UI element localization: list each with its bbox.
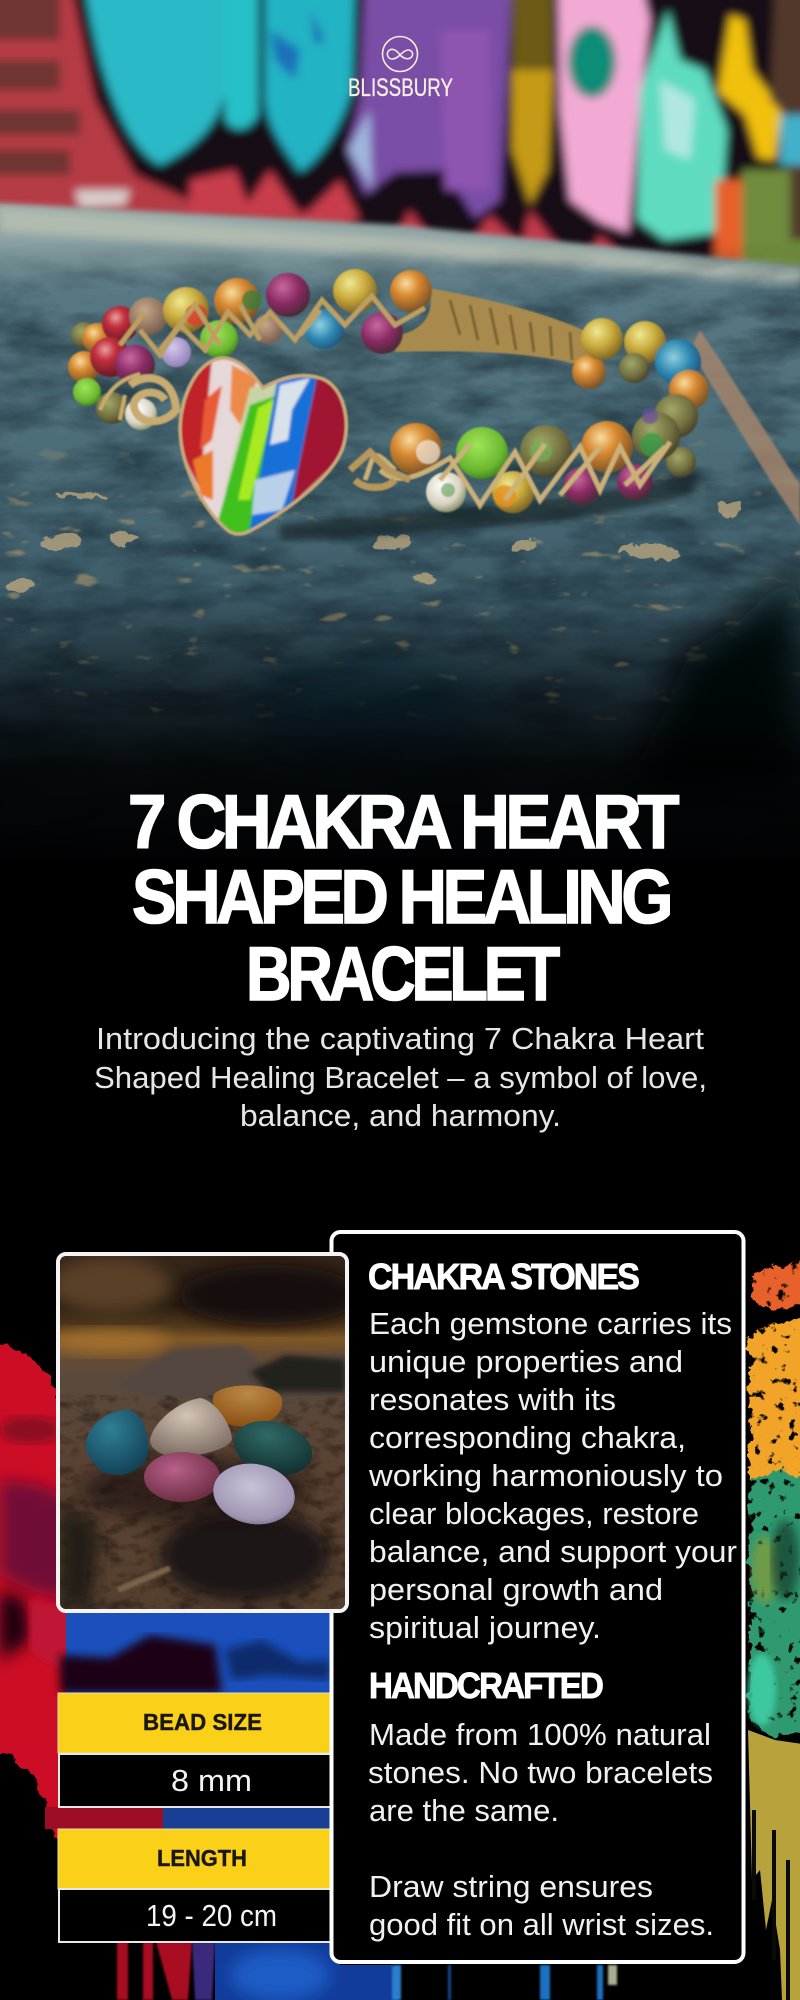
brand name: BLISSBURY: [348, 74, 453, 102]
panel: text card: [332, 1232, 744, 1962]
spec table: BEAD SIZE: [143, 1709, 262, 1735]
twig: [118, 1568, 170, 1590]
yellow paint: [750, 1315, 800, 1480]
pale ledge top: [0, 208, 800, 285]
chakra stones paragraph: Each gemstone carries its: [369, 1306, 732, 1341]
heading: chakra stones: CHAKRA STONES: [368, 1256, 639, 1297]
heading: BRACELET: [246, 932, 560, 1017]
far rocks: [142, 1343, 344, 1375]
chakra stones paragraph: spiritual journey.: [369, 1610, 601, 1645]
stone ledge: [0, 199, 800, 804]
front bottom beads: [426, 447, 696, 513]
red paint: [0, 1346, 190, 1838]
fit paragraph: Draw string ensures: [369, 1869, 653, 1904]
right back beads: [572, 318, 709, 438]
hero photo: [0, 0, 800, 880]
icon: infinity circle: [382, 36, 418, 72]
left clasp knot: [100, 374, 176, 430]
pink stone: [144, 1452, 220, 1502]
heading: SHAPED HEALING: [132, 855, 670, 940]
spec table: [58, 1693, 334, 1942]
contact shadow: [280, 470, 700, 540]
intro paragraph: Introducing the captivating 7 Chakra Heart: [96, 1021, 704, 1056]
length value: [59, 1889, 334, 1942]
strip blue: [163, 1807, 333, 1829]
chakra stones paragraph: [368, 1306, 737, 1645]
heading: [128, 780, 679, 1017]
back cord: [395, 288, 600, 368]
warm blurred top left: [50, 1257, 170, 1313]
stone stripes: [180, 358, 346, 534]
chakra stones paragraph: working harmoniously to: [368, 1458, 723, 1493]
amber horizon: [50, 1330, 170, 1354]
dark shade: [0, 1590, 30, 1660]
dark red gap: [60, 1635, 222, 1693]
chakra stones paragraph: corresponding chakra,: [369, 1420, 686, 1455]
purple shade: [0, 1480, 70, 1600]
bead size label: [58, 1693, 333, 1753]
intro paragraph: balance, and harmony.: [240, 1098, 561, 1133]
green paint: [750, 1470, 800, 1740]
graffiti wall: [0, 0, 800, 280]
bottom fade: [0, 590, 800, 860]
handcrafted paragraph: [368, 1717, 713, 1828]
back cord zigzag: [120, 296, 425, 355]
dark drip lines: [752, 1810, 790, 2000]
front top beads: [390, 408, 680, 479]
dark red mottling: [0, 1416, 60, 1444]
heading: 7 CHAKRA HEART: [128, 780, 679, 865]
bottom drips purple: [192, 1942, 215, 2000]
blue paint main: [66, 1608, 334, 1694]
chakra stones paragraph: unique properties and: [369, 1344, 683, 1379]
right clasp: [350, 452, 410, 488]
tan rock edge: [690, 330, 800, 525]
spec table: 19 - 20 cm: [146, 1898, 277, 1933]
intro paragraph: Shaped Healing Bracelet – a symbol of love,: [94, 1060, 707, 1095]
olive speckle: [751, 1536, 779, 1604]
teal stone: [86, 1410, 148, 1475]
tan flecks: [7, 493, 744, 592]
intro paragraph: [94, 1021, 707, 1133]
bottom blue: [215, 1942, 398, 2000]
dark rock corner: [642, 552, 800, 776]
front cord zigzag: [365, 442, 670, 505]
rock texture: [0, 248, 800, 721]
photo: chakra stones: [50, 1254, 360, 1611]
chakra stones paragraph: resonates with its: [369, 1382, 616, 1417]
dark blurred top right: [180, 1265, 360, 1325]
bracelet: [68, 269, 709, 540]
photo background: [60, 1256, 345, 1609]
blue dark veins: [225, 1640, 330, 1680]
chakra stones paragraph: personal growth and: [369, 1572, 663, 1607]
handcrafted paragraph: Made from 100% natural: [369, 1717, 711, 1752]
spec table: 8 mm: [171, 1763, 252, 1798]
back bottom beads: [68, 309, 403, 424]
dark green patch: [771, 1520, 799, 1600]
blue dark patch: [257, 662, 459, 726]
lilac stone: [213, 1464, 295, 1524]
bottom blue light: [230, 1949, 330, 2000]
left paint splash: [0, 1346, 398, 2000]
yellow drips: [748, 1730, 800, 2000]
soil grain: [60, 1395, 345, 1609]
bead size value: [59, 1754, 334, 1807]
lower paint streaks: [392, 1965, 617, 2000]
heart pendant: [177, 355, 350, 537]
red highlights: [30, 1600, 85, 1670]
gold rim: [180, 358, 346, 534]
back top beads: [82, 269, 432, 385]
tan fleck texture: [0, 400, 800, 720]
pebble shadow: [160, 1509, 330, 1601]
strip red: [45, 1807, 163, 1829]
teal light: [748, 1654, 776, 1726]
chakra stones paragraph: clear blockages, restore: [369, 1496, 699, 1531]
white stone: [150, 1398, 232, 1456]
stone shadow: [80, 1458, 310, 1522]
green stone: [234, 1420, 312, 1475]
right paint splash: [748, 1262, 800, 2000]
chakra stones paragraph: balance, and support your: [369, 1534, 737, 1569]
fit paragraph: good fit on all wrist sizes.: [369, 1907, 714, 1942]
length label: [58, 1829, 333, 1889]
handcrafted paragraph: are the same.: [369, 1793, 559, 1828]
heading: handcrafted: HANDCRAFTED: [369, 1665, 603, 1706]
spec table: LENGTH: [157, 1845, 247, 1871]
bottom drips red: [117, 1942, 192, 2000]
fit paragraph: [369, 1869, 714, 1942]
handcrafted paragraph: stones. No two bracelets: [368, 1755, 713, 1790]
soil shade: [60, 1500, 100, 1609]
orange top: [752, 1262, 800, 1310]
amber stone: [213, 1385, 282, 1426]
logo: [348, 36, 453, 102]
